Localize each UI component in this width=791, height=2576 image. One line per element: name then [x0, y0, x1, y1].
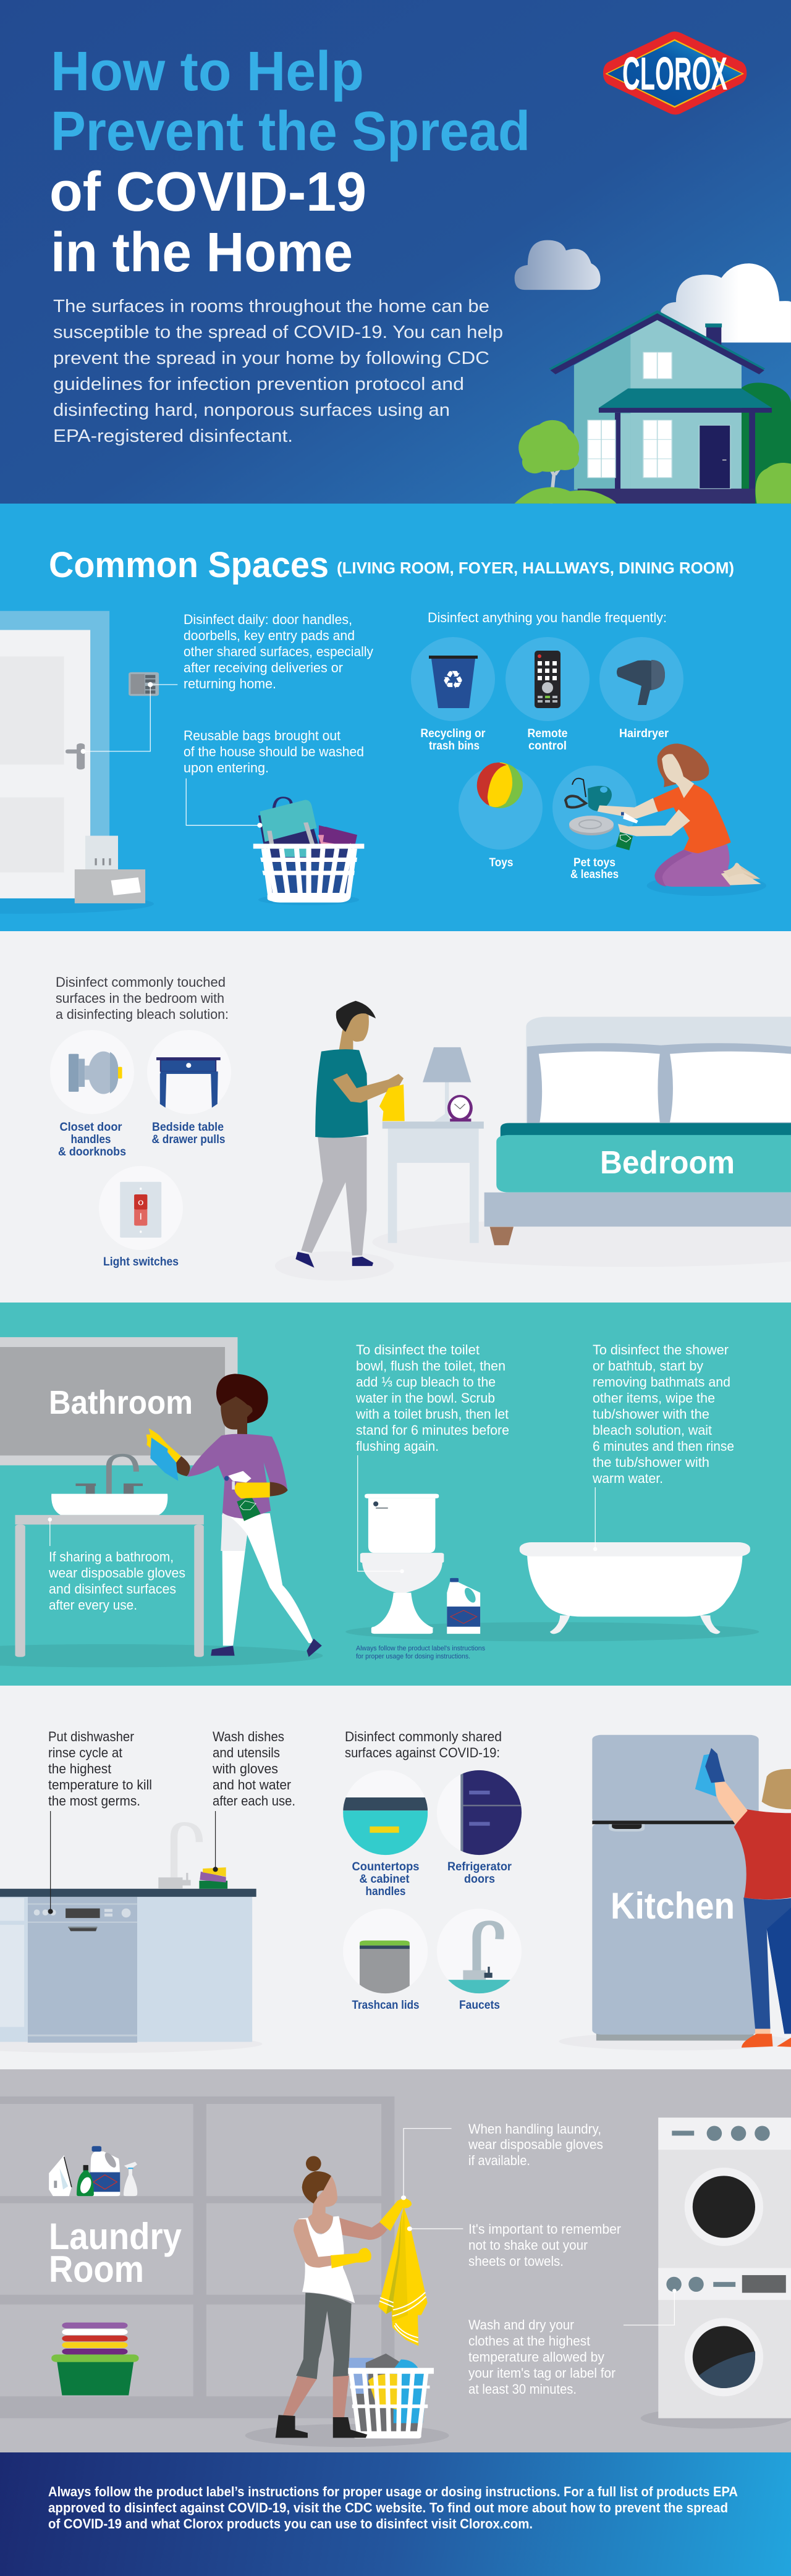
- icon labels: Pet toys: [573, 856, 615, 869]
- text: toilet instructions: [355, 1342, 509, 1454]
- icon labels: handles: [366, 1885, 405, 1898]
- text: shared surfaces: surfaces against COVID-19:: [345, 1745, 500, 1760]
- logo: Clorox diamond: [603, 32, 747, 114]
- text: wash and dry: temperature allowed by: [468, 2349, 604, 2365]
- text: shower instructions: other items, wipe the: [593, 1390, 715, 1406]
- text: reusable bags: of the house should be washed: [184, 744, 364, 759]
- text: reusable bags: upon entering.: [184, 760, 269, 775]
- panel: header: [0, 0, 791, 504]
- icon: bedside table: [147, 1030, 231, 1114]
- text: handling laundry: if available.: [468, 2153, 530, 2168]
- icon labels: Refrigerator: [447, 1860, 512, 1873]
- icon labels: trash bins: [429, 740, 480, 753]
- illustration: yellow towel and glove: [378, 2198, 428, 2346]
- icon: refrigerator doors: [460, 1770, 522, 1855]
- text: wash dishes: with gloves: [212, 1761, 278, 1776]
- text: handling laundry: When handling laundry,: [468, 2121, 601, 2137]
- icon: recycling bin: ♻: [442, 666, 464, 695]
- text: dishwasher: rinse cycle at: [48, 1745, 122, 1760]
- heading: laundry room: Laundry: [49, 2216, 182, 2257]
- text: wash and dry: Wash and dry your: [468, 2317, 574, 2333]
- icon labels: Countertops: [352, 1860, 419, 1873]
- icon labels: Recycling or: [420, 727, 486, 740]
- text: handling laundry: wear disposable gloves: [468, 2137, 603, 2152]
- text: wash dishes: [212, 1729, 295, 1809]
- title: in the Home: [51, 222, 353, 284]
- icon: hairdryer: [599, 637, 683, 721]
- text: bedroom instructions: [56, 974, 229, 1022]
- text: shower instructions: the tub/shower with: [593, 1455, 709, 1470]
- intro text: disinfecting hard, nonporous surfaces using an: [53, 400, 450, 420]
- illustration: house with clouds and trees: [515, 240, 791, 504]
- text: wash dishes: Wash dishes: [213, 1729, 284, 1744]
- icon: door knob: [50, 1030, 134, 1114]
- intro text: The surfaces in rooms throughout the home can be: [53, 297, 489, 316]
- text: handling laundry: [468, 2121, 603, 2168]
- text: product label note: Always follow the product label's instructions: [356, 1645, 485, 1652]
- icon labels: Hairdryer: [619, 727, 669, 740]
- illustration: bed, nightstand and lamp: [275, 1017, 791, 1281]
- footer text: [48, 2484, 738, 2532]
- illustration: washer and dryer: [624, 2118, 791, 2429]
- text: shower instructions: [592, 1342, 734, 1486]
- heading: laundry room: [49, 2216, 182, 2290]
- text: disinfect daily: doorbells, key entry pads and: [184, 628, 355, 643]
- text: wash dishes: and hot water: [213, 1777, 291, 1793]
- icon: faucet: [448, 1920, 510, 1993]
- text: sharing a bathroom: after every use.: [49, 1597, 137, 1613]
- illustration: refrigerator: [559, 1735, 791, 2050]
- panel: bathroom: [0, 1303, 791, 1686]
- text: bedroom instructions: surfaces in the bedroom with: [56, 990, 224, 1006]
- panel: common spaces: [0, 504, 791, 931]
- text: shower instructions: warm water.: [592, 1471, 663, 1486]
- illustration: front door, keypad and packages: [0, 611, 177, 914]
- icon: countertops and cabinet handles: [343, 1797, 428, 1855]
- illustration: bathtub: [520, 1487, 750, 1634]
- text: do not shake: [468, 2221, 621, 2269]
- text: dishwasher: Put dishwasher: [48, 1729, 134, 1744]
- icon labels: Faucets: [459, 1999, 500, 2012]
- text: shower instructions: removing bathmats and: [593, 1374, 730, 1390]
- panel: laundry room: [0, 2069, 791, 2452]
- text: shower instructions: tub/shower with the: [593, 1406, 709, 1422]
- text: do not shake: not to shake out your: [468, 2237, 588, 2253]
- icon labels: control: [528, 740, 567, 753]
- text: sharing a bathroom: If sharing a bathroom,: [49, 1549, 174, 1565]
- illustration: person wiping refrigerator: [695, 1748, 791, 2048]
- text: bedroom instructions: Disinfect commonly touched: [56, 974, 226, 990]
- text: shower instructions: 6 minutes and then rinse: [593, 1438, 734, 1454]
- icon: light switch: [99, 1166, 183, 1250]
- text: disinfect daily: Disinfect daily: door handles,: [184, 612, 352, 627]
- intro text: EPA-registered disinfectant.: [53, 426, 293, 446]
- icon labels: & leashes: [570, 868, 619, 881]
- icon labels: Toys: [489, 856, 513, 869]
- footer text: of COVID-19 and what Clorox products you can use to disinfect visit Clorox.com.: [48, 2516, 533, 2532]
- text: toilet instructions: To disinfect the toilet: [356, 1342, 480, 1358]
- text: reusable bags: Reusable bags brought out: [184, 728, 341, 743]
- title: of COVID-19: [49, 161, 366, 223]
- icon: pet toys and leashes: [552, 766, 637, 850]
- text: wash and dry: at least 30 minutes.: [468, 2381, 577, 2397]
- text: wash and dry: your item's tag or label for: [468, 2365, 615, 2381]
- illustration: woman kneeling with spray: [598, 743, 766, 896]
- text: disinfect daily: [184, 612, 373, 691]
- icon labels: Light switches: [103, 1256, 179, 1269]
- illustration: counter, dishwasher and sink: [0, 1811, 262, 2053]
- icon labels: [352, 1860, 512, 2012]
- text: shower instructions: To disinfect the shower: [593, 1342, 729, 1358]
- text: dishwasher: temperature to kill: [48, 1777, 152, 1793]
- icon: remote control: [505, 637, 590, 721]
- illustration: woman wiping mirror: [146, 1374, 322, 1657]
- text: shower instructions: or bathtub, start by: [593, 1358, 703, 1374]
- title: How to Help: [51, 41, 364, 103]
- panel: bedroom: [0, 931, 791, 1303]
- illustration: basket with reusable bags: [186, 779, 364, 905]
- text: reusable bags: [184, 728, 364, 775]
- icon labels: [420, 727, 669, 881]
- text: dishwasher: [48, 1729, 152, 1809]
- text: product label note: for proper usage for dosing instructions.: [356, 1653, 470, 1660]
- text: wash and dry: [468, 2317, 615, 2397]
- icon labels: & doorknobs: [58, 1146, 126, 1159]
- text: shared surfaces: Disinfect commonly shared: [345, 1729, 502, 1744]
- icon: toys ball: [459, 762, 543, 850]
- text: sharing a bathroom: wear disposable gloves: [48, 1565, 185, 1581]
- heading: laundry room: Room: [49, 2249, 144, 2290]
- intro text: susceptible to the spread of COVID-19. You can help: [53, 323, 503, 342]
- text: dishwasher: the highest: [48, 1761, 111, 1776]
- panel: kitchen: [0, 1731, 791, 2048]
- text: toilet instructions: water in the bowl. Scrub: [355, 1390, 495, 1406]
- heading: common spaces: [49, 545, 734, 585]
- text: wash dishes: after each use.: [213, 1793, 295, 1809]
- text: bedroom instructions: a disinfecting bleach solution:: [56, 1007, 229, 1022]
- illustration: woman holding towel: [245, 2156, 449, 2447]
- icon: trashcan lid: [360, 1940, 410, 1993]
- text: disinfect daily: returning home.: [184, 676, 276, 691]
- text: toilet instructions: stand for 6 minutes before: [356, 1422, 509, 1438]
- text: toilet instructions: add ⅓ cup bleach to the: [356, 1374, 496, 1390]
- icon labels: & cabinet: [360, 1873, 410, 1886]
- heading: bedroom: Bedroom: [600, 1145, 735, 1181]
- icon labels: [58, 1121, 225, 1269]
- text: shared surfaces: [345, 1729, 502, 1760]
- illustration: toilet and bleach bottle: [358, 1455, 480, 1634]
- footer text: approved to disinfect against COVID-19, visit the CDC website. To find out more about how to prevent the spread: [48, 2500, 728, 2515]
- text: handle frequently: Disinfect anything you handle frequently:: [428, 610, 667, 625]
- text: do not shake: It's important to remember: [468, 2221, 621, 2237]
- illustration: laundry basket: [333, 2354, 434, 2438]
- icon labels: handles: [70, 1133, 111, 1146]
- heading: kitchen: Kitchen: [611, 1885, 735, 1927]
- icon labels: Trashcan lids: [352, 1999, 419, 2012]
- heading: common spaces: (LIVING ROOM, FOYER, HALLWAYS, DINING ROOM): [337, 559, 734, 577]
- heading: common spaces: Common Spaces: [49, 545, 329, 585]
- illustration: man wiping with cloth: [295, 1001, 405, 1268]
- intro text: prevent the spread in your home by following CDC: [53, 348, 489, 368]
- icon labels: doors: [464, 1873, 495, 1886]
- footer text: Always follow the product label’s instructions for proper usage or dosing instructions. For a full list of products EPA: [48, 2484, 738, 2499]
- illustration: shelves with products and towels: [0, 2097, 394, 2418]
- text: wash dishes: and utensils: [213, 1745, 280, 1760]
- text: do not shake: sheets or towels.: [468, 2253, 564, 2269]
- panel: footer: [0, 2452, 791, 2576]
- text: toilet instructions: flushing again.: [356, 1438, 439, 1454]
- text: disinfect daily: after receiving deliveries or: [184, 660, 343, 675]
- icon labels: Closet door: [59, 1121, 122, 1134]
- text: toilet instructions: bowl, flush the toilet, then: [356, 1358, 505, 1374]
- title: [49, 41, 530, 284]
- callout leader lines: [401, 2129, 463, 2231]
- text: shower instructions: bleach solution, wait: [593, 1422, 712, 1438]
- text: wash and dry: clothes at the highest: [468, 2333, 590, 2349]
- intro text: [53, 297, 503, 446]
- text: product label note: [356, 1645, 485, 1660]
- title: Prevent the Spread: [51, 101, 530, 163]
- text: sharing a bathroom: and disinfect surfaces: [49, 1581, 176, 1597]
- text: toilet instructions: with a toilet brush, then let: [355, 1406, 509, 1422]
- text: sharing a bathroom: [48, 1549, 185, 1613]
- intro text: guidelines for infection prevention protocol and: [53, 374, 464, 394]
- text: disinfect daily: other shared surfaces, especially: [184, 644, 373, 659]
- icon labels: Remote: [528, 727, 567, 740]
- icon labels: Bedside table: [152, 1121, 224, 1134]
- heading: bathroom: Bathroom: [49, 1384, 193, 1421]
- icon labels: & drawer pulls: [152, 1133, 225, 1146]
- illustration: mirror, sink and counter: [0, 1337, 759, 1667]
- text: dishwasher: the most germs.: [48, 1793, 140, 1809]
- icon: recycling bin: [411, 637, 495, 721]
